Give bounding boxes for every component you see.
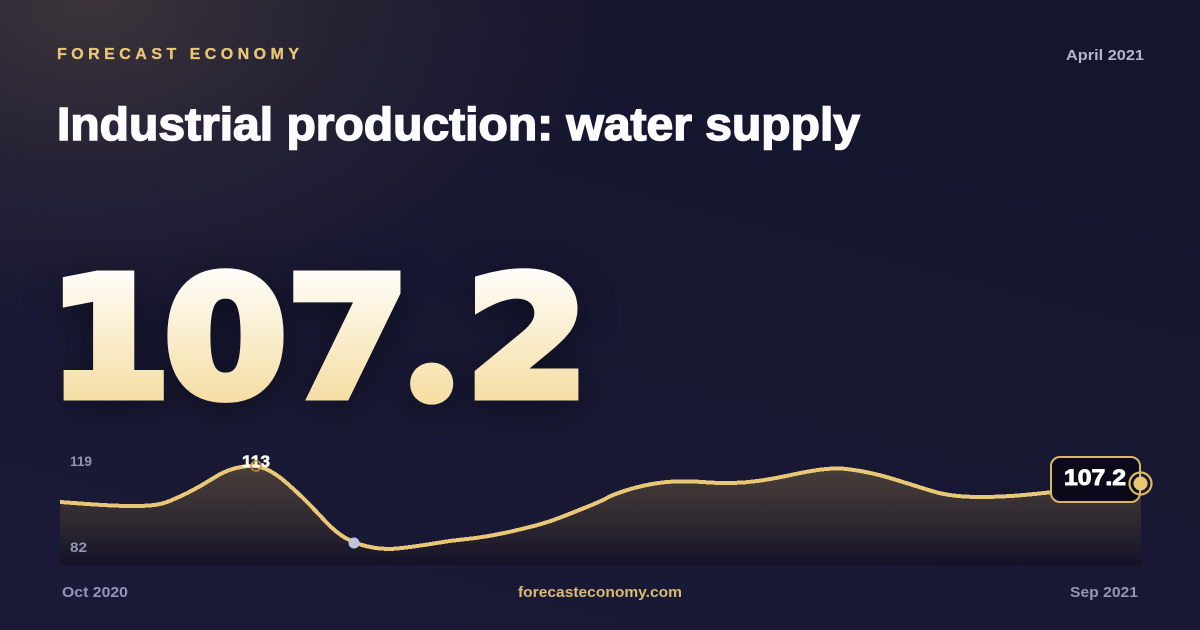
trend line — [60, 466, 1141, 549]
peak marker — [251, 461, 261, 471]
current value marker — [1130, 472, 1152, 494]
title: Industrial production: water supply — [57, 98, 860, 150]
chart — [60, 452, 1152, 565]
current value callout: 107.2 — [1064, 465, 1126, 490]
start date: Oct 2020 — [62, 585, 128, 601]
axis min label: 82 — [70, 540, 87, 555]
big value: 107.2 — [48, 182, 589, 457]
brand label: FORECAST ECONOMY — [57, 46, 299, 63]
current value callout — [1051, 457, 1140, 502]
end date: Sep 2021 — [1070, 585, 1138, 601]
axis max label: 119 — [70, 454, 92, 469]
peak label: 113 — [242, 452, 270, 471]
minimum marker — [348, 538, 360, 548]
website: forecasteconomy.com — [518, 585, 682, 601]
date label: April 2021 — [1066, 47, 1144, 64]
area fill — [60, 466, 1141, 565]
